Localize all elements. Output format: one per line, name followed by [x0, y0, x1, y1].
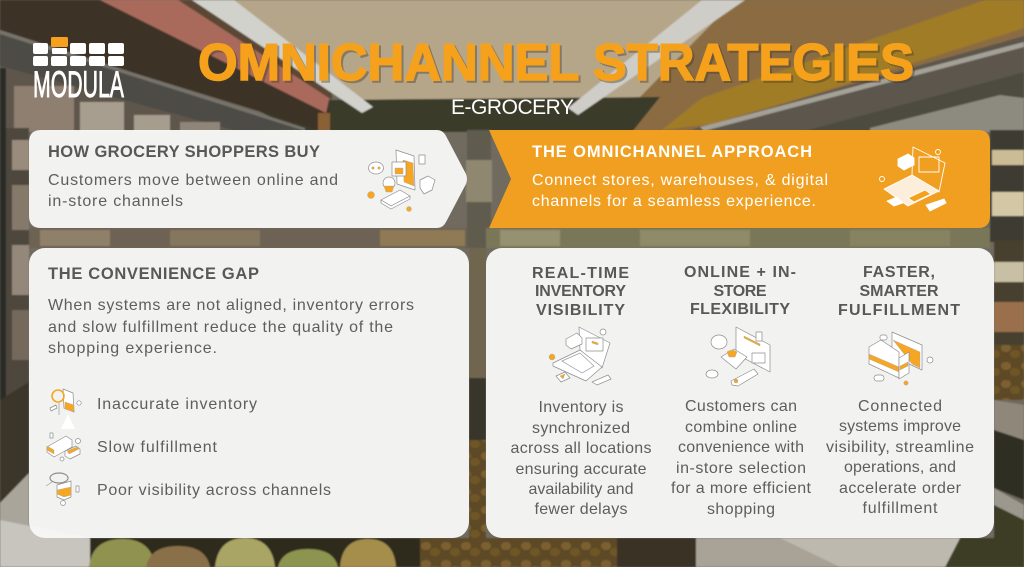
heading: FLEXIBILITY	[690, 301, 790, 318]
band between panels, left	[29, 228, 469, 248]
body text: shopping experience.	[48, 340, 217, 357]
icon: truck and route map	[869, 332, 933, 385]
heading: ONLINE + IN-	[684, 264, 796, 281]
body text: operations, and	[844, 459, 956, 476]
column: online + in-store flexibility	[671, 264, 812, 518]
body text: and slow fulfillment reduce the quality of the	[48, 319, 393, 336]
floor left	[0, 473, 90, 567]
column: real-time inventory visibility	[510, 265, 652, 518]
body text: Connect stores, warehouses, & digital	[532, 172, 828, 189]
icon: magnifier over parcel	[46, 473, 79, 505]
heading	[838, 264, 960, 319]
subtitle: E-GROCERY	[451, 96, 574, 119]
column: faster, smarter fulfillment	[826, 264, 974, 517]
body text	[510, 399, 652, 518]
logo bricks	[33, 43, 124, 66]
title: OMNICHANNEL STRATEGIES	[198, 34, 914, 92]
body text: convenience with	[678, 439, 804, 456]
icon: phone with food order	[368, 150, 435, 212]
heading	[684, 264, 796, 318]
heading: STORE	[714, 283, 767, 300]
brown right ceiling	[625, 0, 1024, 132]
body text: combine online	[685, 419, 797, 436]
heading: INVENTORY	[535, 283, 626, 300]
body text: Inventory is	[538, 399, 624, 416]
item: slow fulfillment	[47, 433, 218, 461]
heading: VISIBILITY	[536, 302, 625, 319]
heading: FASTER,	[863, 264, 935, 281]
bottom strip	[90, 538, 440, 567]
heading: REAL-TIME	[532, 265, 629, 282]
icon: magnifier and report	[50, 389, 81, 429]
icon: laptop storefront	[880, 147, 946, 211]
panel: the convenience gap	[29, 248, 469, 538]
body text: synchronized	[532, 420, 630, 437]
body text: Customers move between online and	[48, 172, 338, 189]
body text	[48, 297, 414, 357]
heading	[532, 265, 629, 319]
body text: Connected	[858, 398, 942, 415]
left beam	[0, 30, 305, 132]
body text	[532, 172, 828, 210]
body text	[48, 172, 338, 210]
right shelves	[990, 130, 1024, 242]
heading: HOW GROCERY SHOPPERS BUY	[48, 143, 320, 161]
body text: in-store selection	[676, 460, 806, 477]
logo: Modula	[33, 37, 124, 105]
item: slow fulfillment: Slow fulfillment	[97, 439, 218, 456]
body text: availability and	[529, 481, 633, 498]
body text	[671, 398, 812, 518]
body text: visibility, streamline	[826, 439, 974, 456]
body text: fulfillment	[862, 500, 938, 517]
item: poor visibility: Poor visibility across channels	[97, 482, 331, 499]
body text: across all locations	[510, 440, 652, 457]
body text: ensuring accurate	[516, 461, 647, 478]
item: inaccurate inventory: Inaccurate inventory	[97, 396, 257, 413]
right shelf beam	[690, 36, 1024, 132]
panel: benefits	[486, 248, 994, 538]
icon: laptop	[549, 327, 611, 385]
top left dark ceiling	[0, 0, 330, 130]
heading: THE OMNICHANNEL APPROACH	[532, 143, 812, 161]
ceiling light tubes	[192, 0, 373, 113]
heading: SMARTER	[860, 283, 939, 300]
beige centre ceiling	[170, 0, 800, 100]
band between panels, right	[486, 228, 990, 248]
heading: FULFILLMENT	[838, 302, 960, 319]
body text: systems improve	[839, 418, 961, 435]
freezer doors	[0, 66, 240, 132]
body text: channels for a seamless experience.	[532, 193, 816, 210]
icon: basket and browser	[706, 327, 770, 386]
body text: fewer delays	[534, 501, 628, 518]
panel: how grocery shoppers buy	[29, 130, 467, 228]
item: inaccurate inventory	[50, 389, 257, 429]
body text: for a more efficient	[671, 480, 812, 497]
body text: accelerate order	[839, 480, 962, 497]
panel: the omnichannel approach	[489, 130, 990, 228]
logo: Modula: MODULA	[33, 64, 124, 105]
icon: delivery truck	[47, 433, 80, 461]
item: poor visibility	[46, 473, 331, 505]
body text: When systems are not aligned, inventory errors	[48, 297, 414, 314]
centre gap	[467, 130, 491, 248]
body text: shopping	[707, 501, 775, 518]
heading: THE CONVENIENCE GAP	[48, 265, 259, 283]
body text	[826, 398, 974, 517]
body text: Customers can	[685, 398, 797, 415]
back wall	[120, 40, 660, 132]
body text: in-store channels	[48, 193, 183, 210]
red strip	[100, 0, 332, 113]
